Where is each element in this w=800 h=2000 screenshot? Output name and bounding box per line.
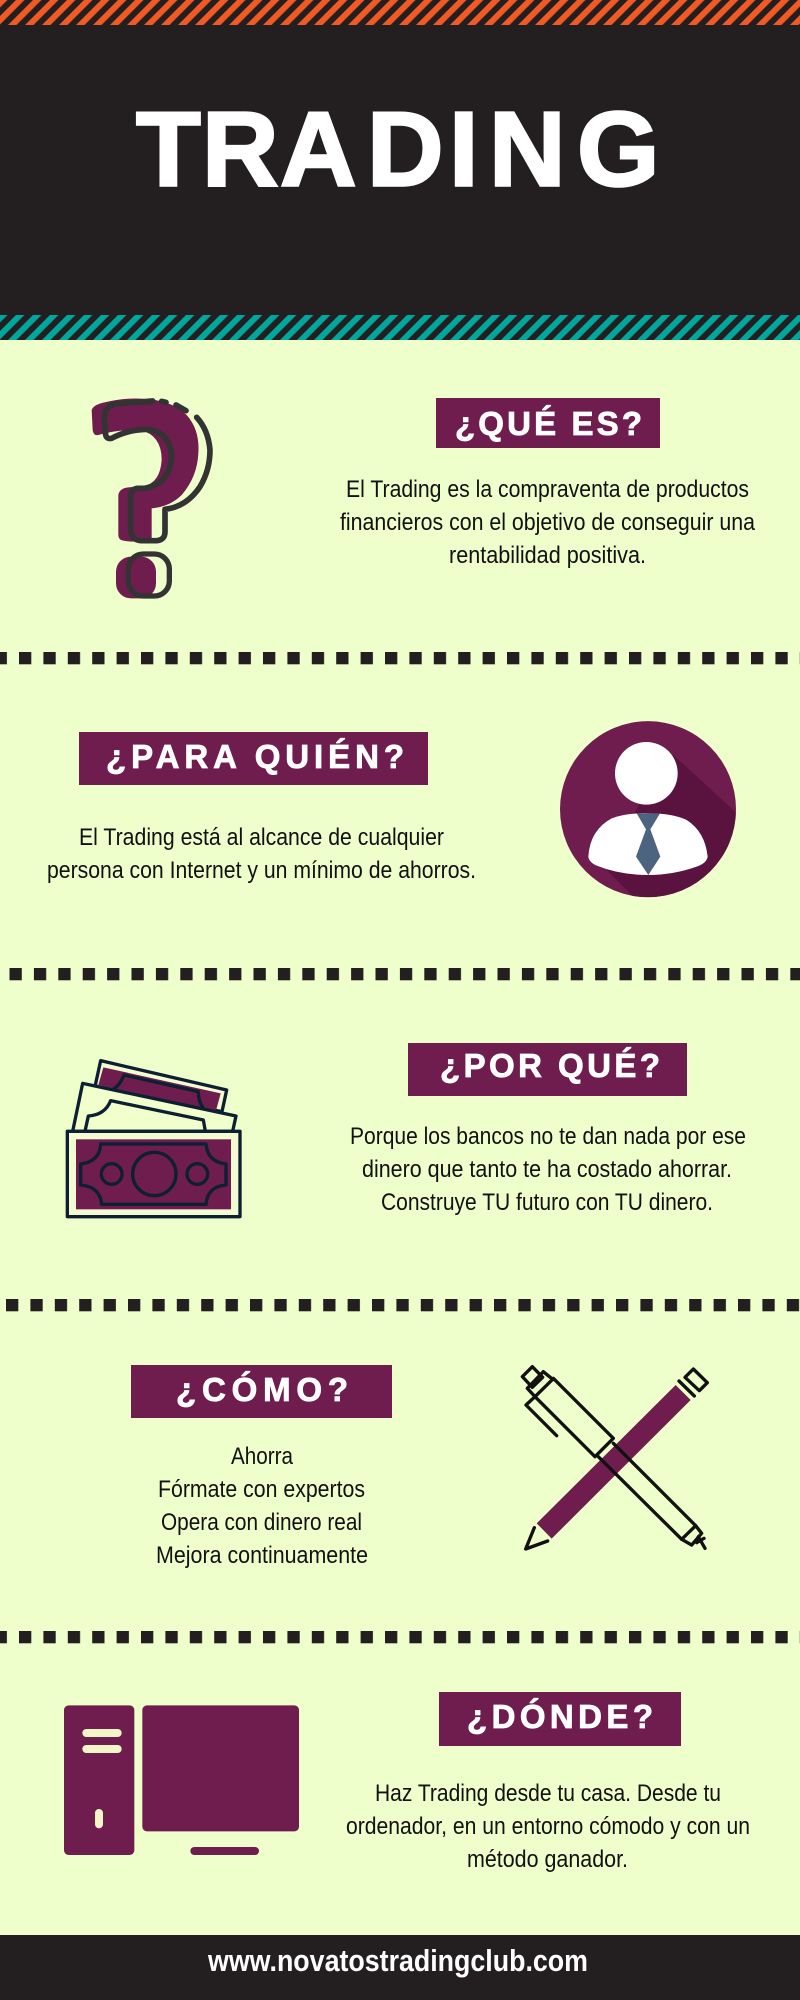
text block: por qué: Construye TU futuro con TU dinero.	[381, 1189, 713, 1216]
text block: por qué: dinero que tanto te ha costado ahorrar.	[362, 1156, 732, 1183]
heading: dónde: ¿DÓNDE?	[467, 1698, 653, 1735]
text block: para quién: El Trading está al alcance de cualquier	[79, 824, 444, 851]
icon: banknotes	[67, 1061, 240, 1217]
heading: dónde	[439, 1692, 681, 1746]
text block: dónde	[346, 1780, 750, 1873]
footer url: www.novatostradingclub.com	[207, 1943, 588, 1978]
panel: cómo	[131, 1365, 707, 1569]
icon: crossed pen and pencil	[522, 1367, 707, 1549]
text block: dónde: Haz Trading desde tu casa. Desde tu	[375, 1780, 721, 1807]
text block: cómo: Mejora continuamente	[156, 1542, 368, 1569]
panel: por qué	[67, 1043, 746, 1217]
text block: para quién	[47, 824, 476, 884]
icon: question mark	[92, 399, 210, 598]
text block: dónde: ordenador, en un entorno cómodo y con un	[346, 1813, 750, 1840]
teal striped strip	[0, 315, 800, 340]
title: TRADING	[136, 90, 659, 208]
heading: cómo	[131, 1365, 392, 1418]
text block: dónde: método ganador.	[467, 1846, 628, 1873]
heading: para quién	[79, 732, 428, 785]
text block: cómo: Opera con dinero real	[161, 1509, 362, 1536]
heading: qué es	[436, 398, 660, 448]
heading: para quién: ¿PARA QUIÉN?	[106, 738, 404, 775]
text block: qué es	[340, 476, 756, 569]
text block: qué es: El Trading es la compraventa de productos	[346, 476, 749, 503]
panel: dónde	[64, 1692, 750, 1873]
text block: cómo: Ahorra	[231, 1443, 294, 1470]
text block: por qué	[350, 1123, 746, 1216]
heading: qué es: ¿QUÉ ES?	[455, 405, 642, 442]
orange striped strip	[0, 0, 800, 25]
heading: por qué: ¿POR QUÉ?	[440, 1047, 660, 1084]
panel: para quién	[48, 721, 736, 898]
panel: qué es	[92, 398, 756, 598]
text block: por qué: Porque los bancos no te dan nada por ese	[350, 1123, 746, 1150]
icon: desktop computer	[64, 1705, 299, 1855]
heading: cómo: ¿CÓMO?	[176, 1371, 348, 1408]
footer	[0, 1935, 800, 2000]
text block: para quién: persona con Internet y un mínimo de ahorros.	[47, 857, 476, 884]
header band	[0, 0, 800, 340]
heading: por qué	[408, 1043, 687, 1096]
text block: cómo	[156, 1443, 368, 1569]
text block: cómo: Fórmate con expertos	[158, 1476, 365, 1503]
text block: qué es: financieros con el objetivo de conseguir una	[340, 509, 756, 536]
icon: businessman	[560, 721, 736, 898]
text block: qué es: rentabilidad positiva.	[449, 542, 646, 569]
